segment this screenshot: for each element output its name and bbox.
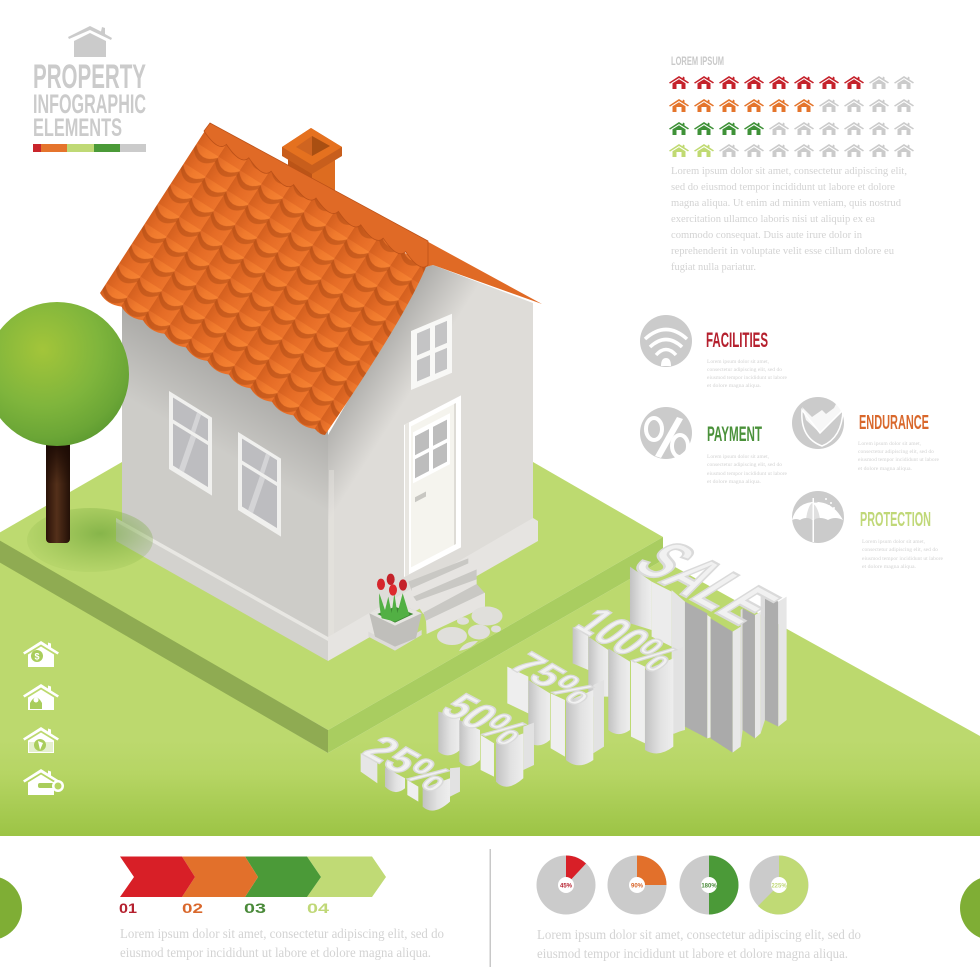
ground — [0, 542, 980, 836]
house — [100, 123, 542, 661]
panel text: reprehenderit in voluptate velit esse cillum dolore eu — [671, 245, 894, 257]
label: 50% — [430, 687, 538, 787]
panel text: fugiat nulla pariatur. — [671, 261, 756, 273]
window: gable — [411, 314, 452, 390]
tree — [0, 302, 153, 572]
step numbers: 04 — [307, 900, 329, 916]
tiled roof — [100, 123, 428, 435]
window: left wall second — [238, 432, 281, 537]
footer divider — [490, 849, 491, 967]
step 04 arrow — [307, 856, 386, 897]
stepping stones — [437, 606, 502, 651]
label: 50%: 50% — [430, 687, 538, 754]
panel text: magna aliqua. Ut enim ad minim veniam, quis nostrud — [671, 197, 901, 209]
icon: wifi — [640, 315, 692, 367]
icon: house — [68, 26, 112, 57]
pie chart text: Lorem ipsum dolor sit amet, consectetur adipiscing elit, sed do — [537, 928, 861, 943]
icon row: red, 8 of 10 — [669, 76, 914, 89]
feature: facilities — [640, 315, 788, 389]
plinth — [116, 470, 538, 661]
description: eiusmod tempor incididunt ut labore — [707, 471, 788, 477]
process text — [120, 927, 444, 961]
feature: endurance — [792, 397, 940, 472]
right wall — [328, 265, 533, 640]
description: consectetur adipiscing elit, sed do — [707, 462, 782, 468]
heading: PAYMENT — [707, 423, 762, 446]
heading — [33, 58, 146, 142]
pie: 90%: 90% — [631, 884, 644, 890]
panel text: sed do eiusmod tempor incididunt ut labore et dolore — [671, 181, 895, 193]
label: 25%: 25% — [354, 728, 463, 799]
description: et dolore magna aliqua. — [707, 479, 762, 485]
icon row: green, 4 of 10 — [669, 122, 914, 135]
ridge tiles — [204, 123, 428, 267]
description: eiusmod tempor incididunt ut labore — [858, 457, 940, 463]
icon: percent — [640, 407, 692, 459]
icon: house with dollar — [23, 641, 59, 667]
pie: 180% — [680, 856, 738, 914]
process text: Lorem ipsum dolor sit amet, consectetur adipiscing elit, sed do — [120, 927, 444, 942]
word: SALE — [616, 532, 796, 753]
icon row: orange, 6 of 10 — [669, 99, 914, 112]
rating panel — [669, 54, 914, 273]
icon: house with person — [23, 684, 59, 710]
label: 100% — [564, 600, 690, 753]
ridge shadow — [325, 185, 425, 245]
icon: shield with chart — [792, 397, 844, 449]
description: et dolore magna aliqua. — [858, 466, 913, 472]
front steps — [408, 558, 485, 634]
description — [858, 441, 940, 472]
heading: FACILITIES — [706, 329, 768, 352]
panel heading: LOREM IPSUM — [671, 54, 724, 68]
description: Lorem ipsum dolor sit amet, — [707, 454, 770, 460]
icon: house with dollar: $ — [34, 652, 40, 662]
description: consectetur adipiscing elit, sed do — [707, 367, 782, 373]
word: SALE: SALE — [616, 532, 796, 635]
pie: 45% — [536, 856, 596, 914]
gable rake — [300, 172, 542, 304]
icon: house with key — [23, 769, 64, 795]
title block — [33, 26, 146, 152]
colour bar — [33, 144, 146, 152]
label: 75%: 75% — [500, 645, 607, 712]
step 01 arrow — [120, 856, 195, 897]
description: consectetur adipiscing elit, sed do — [862, 547, 938, 553]
step 02 arrow — [182, 856, 258, 897]
icon row: light green, 2 of 10 — [669, 144, 914, 157]
description: Lorem ipsum dolor sit amet, — [707, 359, 770, 365]
icon: umbrella — [792, 491, 844, 543]
door — [404, 395, 461, 577]
process text: eiusmod tempor incididunt ut labore et dolore magna aliqua. — [120, 946, 431, 961]
description: eiusmod tempor incididunt ut labore — [707, 375, 788, 381]
raised plot of land — [0, 462, 663, 753]
feature: protection — [792, 491, 944, 570]
footer edge circle right — [960, 876, 980, 940]
panel text: Lorem ipsum dolor sit amet, consectetur adipiscing elit, — [671, 165, 907, 177]
panel text: exercitation ullamco laboris nisi ut aliquip ex ea — [671, 213, 875, 225]
heading: ELEMENTS — [33, 114, 122, 142]
description: eiusmod tempor incididunt ut labore — [862, 556, 944, 562]
flower pot with tulips — [368, 574, 422, 651]
label: 75% — [500, 645, 607, 765]
pie: 45%: 45% — [560, 884, 573, 890]
feature: payment — [640, 407, 788, 485]
step numbers — [119, 900, 329, 916]
pie chart text: eiusmod tempor incididunt ut labore et dolore magna aliqua. — [537, 947, 848, 962]
description — [707, 454, 788, 485]
pie charts — [536, 856, 808, 914]
step numbers: 03 — [244, 900, 266, 916]
side icons on lawn — [23, 641, 64, 795]
step numbers: 01 — [119, 900, 137, 916]
panel text — [671, 165, 907, 273]
step numbers: 02 — [182, 900, 203, 916]
sale text blocks — [354, 532, 796, 811]
heading: INFOGRAPHIC — [33, 89, 146, 119]
panel text: commodo consequat. Duis aute irure dolor in — [671, 229, 862, 241]
label: 100%: 100% — [564, 600, 690, 680]
pie: 180%: 180% — [701, 884, 717, 890]
window: left wall first — [169, 391, 212, 496]
pie: 90% — [608, 856, 666, 914]
description: et dolore magna aliqua. — [707, 383, 762, 389]
chimney — [282, 128, 342, 195]
description: Lorem ipsum dolor sit amet, — [858, 441, 922, 447]
pie chart text — [537, 928, 861, 962]
description: et dolore magna aliqua. — [862, 564, 917, 570]
description: consectetur adipiscing elit, sed do — [858, 449, 934, 455]
icon: house with recycle mark — [23, 727, 59, 753]
process arrows — [119, 856, 386, 916]
footer edge circle left — [0, 876, 22, 940]
step 03 arrow — [245, 856, 321, 897]
description — [707, 359, 788, 389]
left wall — [122, 300, 328, 640]
description — [862, 539, 944, 570]
heading: PROPERTY — [33, 58, 146, 96]
description: Lorem ipsum dolor sit amet, — [862, 539, 926, 545]
pie: 225%: 225% — [771, 884, 787, 890]
pie: 225% — [750, 856, 808, 914]
